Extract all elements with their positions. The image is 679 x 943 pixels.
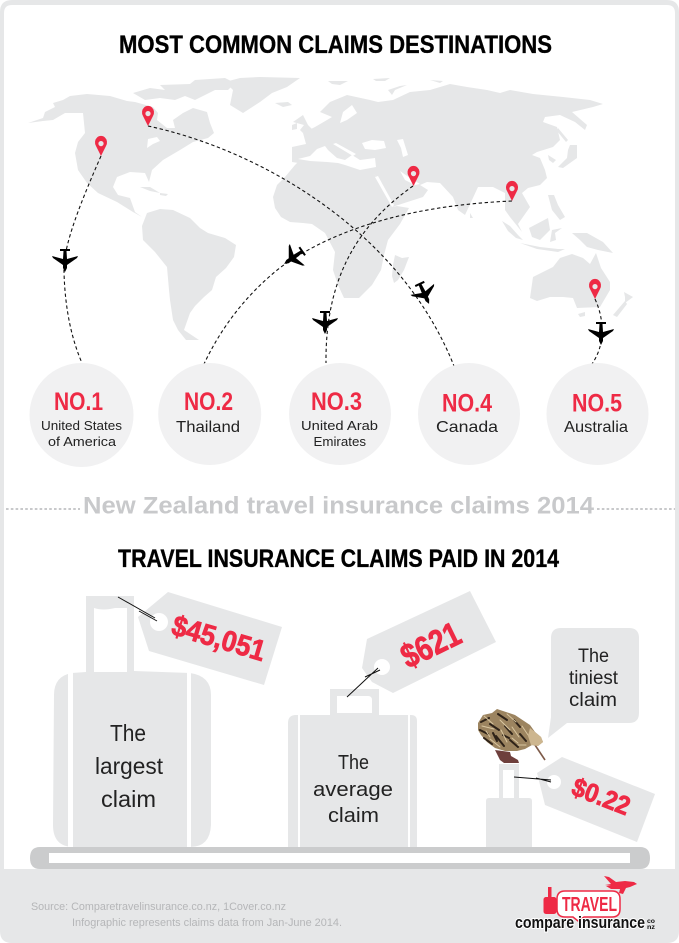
logo: compare travel insurance: TRAVEL	[562, 894, 617, 916]
map water cutouts	[147, 105, 420, 207]
source note	[31, 901, 342, 929]
destination 4: Canada: NO.4	[442, 390, 492, 418]
destination 3: United Arab Emirates: United Arab	[301, 418, 378, 433]
logo: compare travel insurance: nz	[647, 925, 655, 931]
title: most common claims destinations: MOST COMMON CLAIMS DESTINATIONS	[119, 31, 552, 59]
suitcase: average claim: average	[313, 779, 393, 801]
suitcase: average claim: The	[338, 752, 369, 774]
icon: plane, Australia route	[588, 322, 614, 345]
icon: kiwi bird	[478, 709, 545, 763]
destination 3: United Arab Emirates: Emirates	[314, 434, 367, 449]
world map	[28, 77, 633, 340]
icon: map pin, USA	[95, 136, 107, 156]
flight routes	[64, 126, 602, 366]
suitcase: largest claim: claim	[101, 786, 156, 812]
price tag: $621: $621	[395, 615, 467, 676]
source note: Source: Comparetravelinsurance.co.nz, 1Cover.co.nz	[31, 901, 286, 913]
suitcase: average claim	[288, 689, 417, 847]
suitcase: tiniest claim	[486, 764, 532, 847]
icon: map pin, Australia	[589, 279, 601, 299]
destination 1: United States of America: NO.1	[54, 388, 103, 416]
price tag: $621	[347, 591, 496, 697]
logo: compare travel insurance	[515, 876, 655, 932]
destination 5: Australia	[546, 363, 648, 465]
speech bubble: the tiniest claim	[548, 628, 639, 738]
destination 3: United Arab Emirates	[289, 363, 391, 465]
icon: map pin, Canada	[142, 106, 154, 126]
price tag: $0.22: $0.22	[568, 772, 635, 821]
destination 4: Canada: Canada	[436, 419, 498, 436]
suitcase: average claim: claim	[328, 805, 379, 827]
suitcase: largest claim: The	[110, 720, 146, 746]
icon: plane, Canada route	[408, 278, 441, 309]
logo: compare travel insurance: co	[647, 919, 655, 925]
divider heading: New Zealand travel insurance claims 2014	[83, 492, 595, 520]
price tag: $45,051: $45,051	[168, 610, 269, 668]
icon: plane, UAE route	[312, 311, 338, 334]
title: travel insurance claims paid in 2014: TRAVEL INSURANCE CLAIMS PAID IN 2014	[118, 545, 559, 573]
source note: Infographic represents claims data from Jan-June 2014.	[72, 917, 342, 929]
icon: map pin, Thailand	[506, 181, 518, 201]
suitcase: largest claim: largest	[95, 753, 164, 779]
suitcase: largest claim	[53, 596, 211, 847]
destination 5: Australia: NO.5	[572, 390, 622, 418]
destination 2: Thailand: Thailand	[176, 419, 240, 436]
destination 1: United States of America: of America	[48, 434, 117, 449]
destination 2: Thailand: NO.2	[184, 388, 233, 416]
speech bubble: the tiniest claim: The	[578, 646, 609, 667]
price tag: $45,051	[118, 592, 282, 685]
logo: compare travel insurance: compare insurance	[515, 913, 645, 932]
icon: plane, USA route	[52, 249, 78, 272]
price tag: $0.22	[514, 757, 655, 842]
icon: plane, Thailand route	[277, 240, 310, 275]
destination 2: Thailand	[158, 363, 261, 465]
destination 1: United States of America	[30, 363, 134, 467]
speech bubble: the tiniest claim: claim	[569, 690, 617, 711]
destination 3: United Arab Emirates: NO.3	[311, 388, 362, 416]
destination 5: Australia: Australia	[564, 419, 628, 436]
conveyor belt	[30, 847, 650, 869]
speech bubble: the tiniest claim: tiniest	[569, 668, 619, 689]
destination 1: United States of America: United States	[41, 418, 123, 433]
icon: map pin, UAE	[408, 166, 420, 186]
destination 4: Canada	[418, 363, 520, 465]
